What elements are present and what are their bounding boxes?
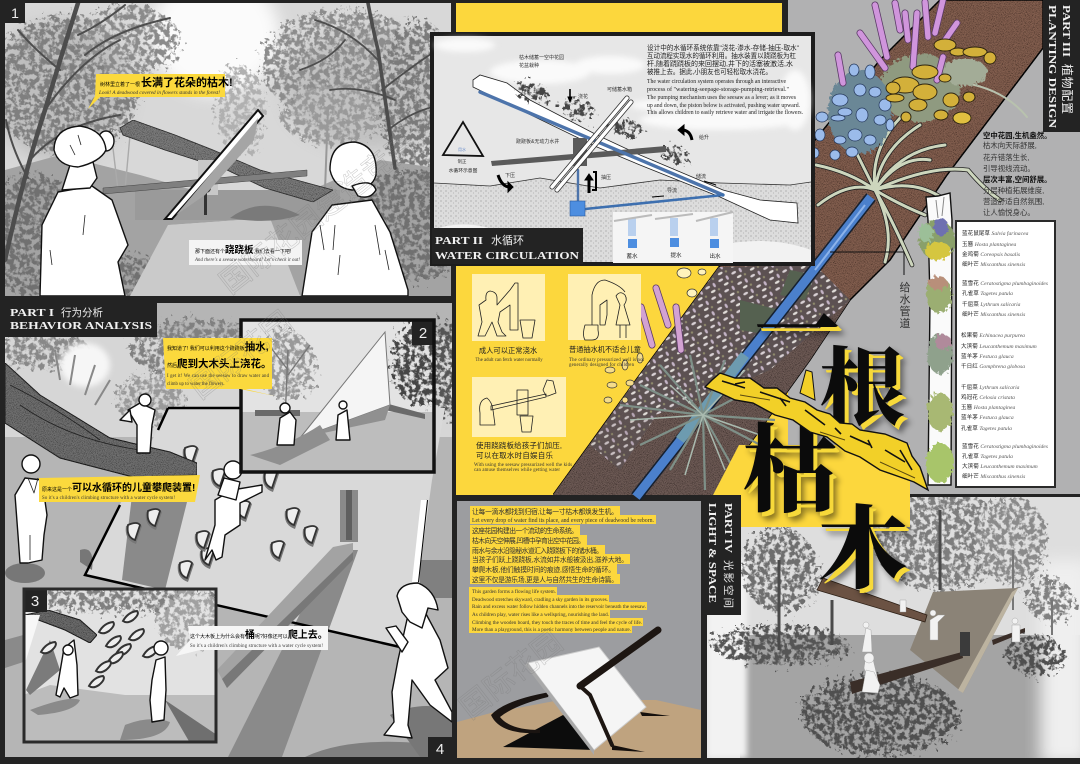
top grass tuft [816,83,1027,265]
Chinese text: 枯木向天空伸展,凹槽中孕育出空中花园。 [472,536,585,545]
planting text: 分层种植拓展维度, [983,186,1044,195]
heading: part IV: PART IV [722,503,733,553]
explanatory text [647,43,804,116]
diagram labels [505,54,709,194]
plant list: 细叶芒 Miscanthus sinensis [962,310,1025,318]
trunk [553,0,1043,495]
panel number 1 [5,3,25,23]
panel 3 inset [20,584,225,743]
panel: light and space render [707,490,1080,764]
panel 3 inset: 3 [31,593,39,610]
explanatory text: The pumping mechanism uses the seesaw as a lever; as it moves [647,95,797,101]
explanatory text: The water circulation system operates through an interactive [647,79,786,85]
bottom frame [0,758,1080,764]
shadows on the ground [5,502,452,757]
caption: seesaw: 跷跷板,我们去看一下吧! [225,245,291,256]
callout: pump water: 然后 [167,362,177,369]
plant list: 蓝花鼠尾草 Salvia farinacea [962,229,1029,237]
blue flowers [811,64,894,160]
heading: part IV: LIGHT & SPACE [706,503,717,603]
explanatory text: process of "watering-seepage-storage-pumping-retrieval." [647,86,789,93]
plant list: 大滨菊 Leucanthemum maximum [961,342,1037,350]
Chinese text: As children play, water rises like a wellspring, nourishing the land. [472,612,610,618]
water pipes [480,92,723,209]
small render figures [862,600,1020,693]
callout: pump water: 我知道了! 我们可以利用这个跷跷板 [167,345,245,352]
callout: pump water: climb up to water the flowers. [167,382,225,387]
yellow flowers [886,39,996,124]
diagram labels: 花盆栽种 [519,62,539,69]
figure: child with plait [302,142,408,296]
label: water pipe [830,252,910,330]
heading: part I [0,303,157,337]
Chinese text: Let every drop of water find its place, and every piece of deadwood be reborn. [472,517,654,524]
Chinese text: Deadwood stretches skyward, cradling a sky garden in its grooves. [472,597,609,603]
Chinese text: 攀爬木板,他们触摸时间的痕迹,感悟生命的循环。 [472,565,615,574]
panel 2 inset [241,320,448,472]
Chinese text: This garden forms a flowing life system. [472,588,557,595]
callout: pump water: 爬到大木头上浇花。 [177,357,272,370]
tall grass [55,350,110,405]
heading: part I: 行为分析 [61,306,103,319]
comparison: seesaw well: With using the seesaw pressurized well the kids [474,463,572,468]
support beam [217,543,353,688]
comparison: child at the well [568,274,645,368]
label: water pipe: 管 [900,304,910,318]
caption: seesaw [189,240,302,265]
plant list: 细叶芒 Miscanthus sinensis [962,472,1025,480]
climbing holds [126,446,319,582]
model floor [457,700,701,758]
explanatory text: 设计中的水循环系统依靠"浇花-渗水-存储-抽压-取水" [647,43,800,52]
callout: climbing device: So it's a children's climbing structure with a water cycle system! [42,496,175,501]
panel number 4: 4 [436,741,444,758]
small piston diagrams: 出水 [709,252,721,260]
planting text: 层次丰富,空间舒展。 [983,175,1052,184]
heading: part IV: 光影空间 [722,560,735,608]
Chinese text: Climbing the wooden board, they touch the traces of time and feel the cycle of life. [472,619,643,626]
callout: climbing device: 原来这是一个 [42,486,72,493]
diagram labels: 可储蓄水箱 [607,86,632,93]
heading: part II: WATER CIRCULATION [435,250,579,262]
Chinese text: 让每一滴水都找到归宿,让每一寸枯木都焕发生机。 [472,507,618,516]
callout: pump water [163,338,275,396]
dark gap beside the yellow panel [782,0,788,33]
plant list: 千屈菜 Lythrum salicaria [962,300,1021,308]
plant list: 千日红 Gomphrena globosa [961,362,1025,370]
comparison: seesaw well: can amuse themselves while getting water [474,468,560,473]
callout: climbing device: 可以水循环的儿童攀爬装置! [72,481,195,494]
white log with pipe [473,75,798,223]
plant list: 玉簪 Hosta plantaginea [961,403,1015,411]
small piston diagrams [613,212,733,263]
heading: part III: PART III [1060,5,1071,57]
dark line above render [910,494,1080,497]
Chinese text: 雨水与余水沿隐秘水道汇入跷跷板下的储水桶。 [472,546,603,555]
Chinese text: More than a playground, this is a poetic harmony between people and nature. [472,627,632,633]
water tank [570,201,585,216]
blue water pipe [636,197,871,497]
caption: seesaw: 那下面还有个 [195,248,225,255]
leaf mass [828,54,987,154]
panel: water circulation [432,34,813,264]
arrows [498,89,716,197]
lower purple flowers [641,288,681,350]
callout: bucket [176,626,328,656]
heading: part III [1043,0,1080,132]
explanatory text: 杆,随着跷跷板的来回摆动,井下的活塞被激活,水 [647,59,793,68]
speech bubble: Look! A deadwood covered in flowers stands in the forest! [98,89,220,96]
explanatory text: 被推上去。据此,小朋友也可轻松取水浇花。 [647,67,772,76]
Chinese text: 当孩子们跃上跷跷板,水流如井水般被汲出,滋养大地。 [472,555,628,564]
title: 一根枯木: 木 [818,476,908,606]
comparison: adult at the well: The adult can fetch water normally [475,358,543,363]
figure: child with cap [40,126,128,296]
yellow deadwood log [705,370,928,490]
pale flower buds [604,268,706,403]
plant list: 千屈菜 Lythrum salicaria [961,383,1020,391]
purple flower spikes [838,0,957,83]
heading: part IV [706,495,741,615]
plant list: 孔雀草 Tagetes patula [962,452,1013,460]
climbing wall [85,408,445,647]
heading: part II: PART II [435,235,483,247]
Chinese text: Rain and excess water follow hidden channels into the reservoir beneath the seesaw. [472,603,647,610]
seesaw plank [103,170,307,194]
callout: pump water: 抽水, [245,340,269,353]
panel: light and space text and model: 国际花园 [454,626,569,726]
figure: child on log [120,394,155,453]
planting text [983,131,1052,217]
wall outline [85,408,400,647]
grey background behind planting [788,0,1080,497]
small piston diagrams: 提水 [670,251,682,259]
heading: part II: 水循环 [491,234,524,247]
plant list: 蓝羊茅 Festuca glauca [961,413,1014,421]
log branch [5,363,197,477]
panel number 1: 1 [11,5,19,21]
plant list [956,221,1055,487]
comparison: adult at the well [472,274,545,363]
model deadwood [580,630,658,745]
heading: part III: PLANTING DESIGN [1046,5,1057,129]
comparison: seesaw well: 可以在取水时自娱自乐 [476,450,554,460]
figure: adult [15,455,47,563]
explanatory text: 互动流程实现水的循环利用。抽水装置以跷跷板为杠 [647,51,796,60]
water triangle diagram: 制正 [458,158,467,165]
label: water pipe: 水 [900,293,910,306]
panel: behaviour analysis scene [0,303,467,758]
label: water pipe: 给 [900,281,910,294]
Chinese text: 这里不仅是游乐场,更是人与自然共生的生命诗篇。 [472,575,618,584]
Chinese text: 这座花园构建出一个流动的生命系统。 [472,526,578,535]
planting text: 营造舒适自然氛围, [983,197,1044,206]
planting text: 枯木向天际舒展, [983,141,1037,150]
comparison: child at the well: generally designed for children [569,363,635,368]
plant list: 松果菊 Echinacea purpurea [961,331,1025,339]
label: water pipe: 道 [900,316,910,330]
plank [850,652,963,694]
white diagonal board [552,98,631,190]
flower field [625,265,850,420]
heading: part II [432,228,583,264]
speech bubble: 长满了花朵的枯木! [141,75,233,89]
plant list: 细叶芒 Miscanthus sinensis [962,260,1025,268]
model shadows [503,715,594,750]
plant list: 玉簪 Hosta plantaginea [962,240,1016,248]
ground [434,178,811,262]
panel: light and space text and model [454,501,701,758]
figure: girl walking [384,583,452,738]
explanatory text: up and down, the piston below is activated, pushing water upward. [647,103,801,109]
callout: bucket: 这个大木板上为什么会有 [190,633,245,640]
heading: part III: 植物配置 [1060,64,1075,114]
model white board [528,647,646,750]
diagram labels: 抽压 [601,174,611,181]
panel 1: children discover the deadwood in the forest: 国际花园建造竞赛 [214,127,423,301]
plant list: 孔雀草 Tagetes patula [961,424,1012,432]
planting text: 让人愉悦身心。 [983,208,1035,217]
panel 1: children discover the deadwood in the forest [0,0,470,305]
panel 2 inset: 2 [419,325,427,342]
lower grass tuft [620,355,775,490]
wall board [910,588,1018,693]
log [817,578,927,622]
planted shrubs [515,83,689,163]
comparison: child at the well: 普通抽水机不适合儿童 [569,345,641,354]
comparison: adult at the well: 成人可以正常浇水 [479,346,538,355]
diagram labels: 储流 [696,173,706,180]
plant list: 鸡冠花 Celosia cristata [961,393,1015,401]
comparison: seesaw well: 使用跷跷板给孩子们加压, [476,440,562,450]
yellow block behind title [713,445,910,527]
caption: seesaw: And there's a seesaw waterboard! Let's check it out! [194,258,300,263]
Chinese text [469,506,656,633]
callout: climbing device [39,475,200,502]
comparison: seesaw well [472,377,572,473]
title: 一根枯木: 一 [754,263,840,385]
panel: behaviour analysis scene: 国际花园 [184,306,299,406]
callout: bucket: So it's a children's climbing structure with a water cycle system! [190,644,323,649]
title: 一根枯木: 根 [819,321,905,443]
diagram labels: 导流 [667,187,677,194]
speech bubble: 树林里立着了一根 [100,81,140,88]
water triangle diagram: 水循环示意图 [449,167,478,174]
water triangle diagram: 用水 [458,146,466,152]
small piston diagrams: 蓄水 [626,252,638,260]
plant list: 大滨菊 Leucanthemum maximum [962,462,1038,470]
comparison: child at the well: The ordinary pressurized well is not [569,358,645,363]
plant list: 孔雀草 Tagetes patula [962,289,1013,297]
heading: part I: BEHAVIOR ANALYSIS [10,320,152,332]
callout: pump water: I get it! We can use the seesaw to draw water and [167,374,270,379]
speech bubble [88,74,233,109]
plant list: 金鸡菊 Coreopsis basalis [962,250,1020,258]
diagram labels: 给升 [699,134,709,141]
seesaw board [165,110,263,219]
plant list: 蓝雪花 Ceratostigma plumbaginoides [962,442,1048,450]
diagram labels: 下压 [505,173,515,179]
title: 一根枯木: 枯 [742,395,838,531]
explanatory text: This allows children to easily retrieve water and irrigate the flowers. [647,109,804,116]
water triangle diagram [443,122,483,174]
plant list: 蓝羊茅 Festuca glauca [961,352,1014,360]
diagram labels: 跷跷板&无动力水井 [516,138,559,145]
planting text: 空中花园,生机盎然。 [983,131,1052,140]
figure: climbing child [205,461,262,560]
panel number 4 [428,737,452,758]
callout: bucket: 桶呢?好像还可以爬上去。 [245,630,328,641]
heading: part I: PART I [10,307,54,319]
seesaw plank and post [491,138,666,166]
yellow panel [456,3,788,495]
diagram labels: 浇花 [578,93,588,100]
deadwood log [120,120,333,202]
title: 一根枯木 [742,263,908,606]
planting text: 花卉错落生长, [983,153,1029,162]
plant list: 蓝雪花 Ceratostigma plumbaginoides [962,279,1048,287]
planting text: 引导视线流动。 [983,164,1035,173]
diagram labels: 枯木储蓄一空中花园 [519,54,564,61]
illustration: deadwood trunk with planting [553,0,1043,497]
plant column [919,193,955,485]
